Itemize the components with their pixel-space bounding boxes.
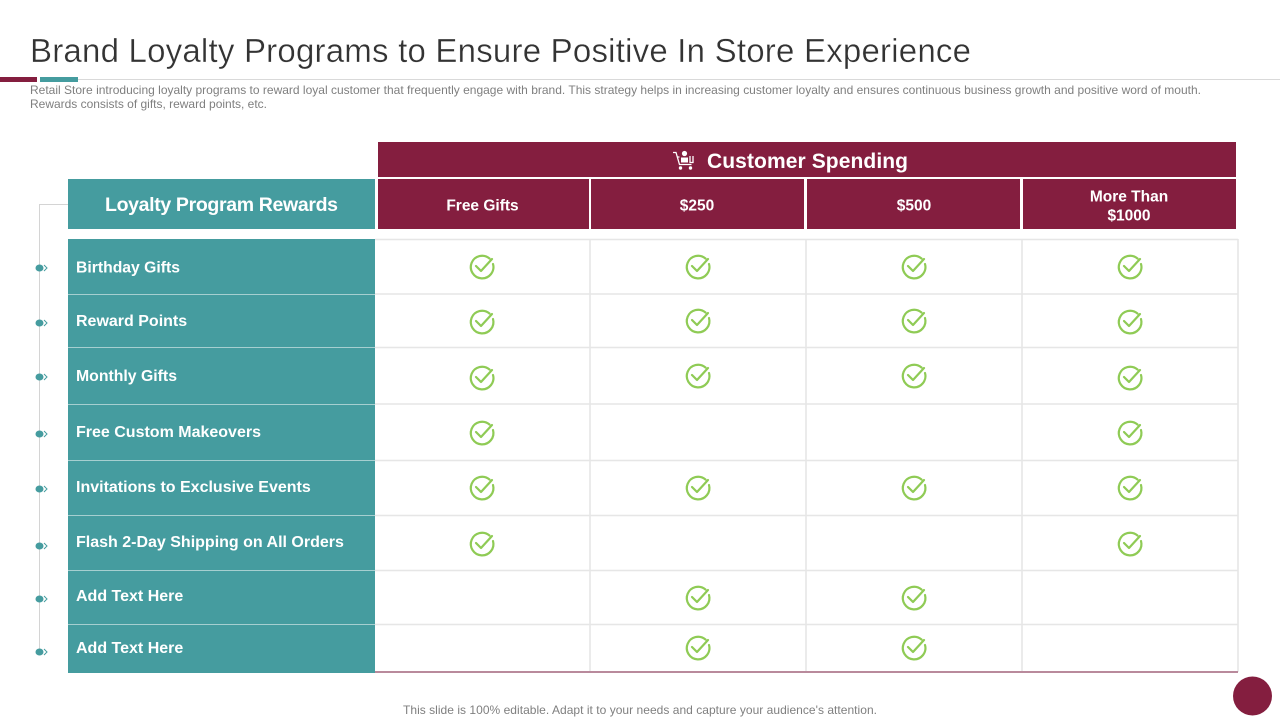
title: Brand Loyalty Programs to Ensure Positive In Store Experience [30, 32, 971, 69]
title accent rule [0, 77, 1280, 82]
panel: reward row labels: Invitations to Exclusive Events [76, 479, 311, 496]
footer note: This slide is 100% editable. Adapt it to your needs and capture your audience's attention. [403, 703, 877, 717]
table bottom rule [375, 671, 1238, 673]
description text: Retail Store introducing loyalty programs to reward loyal customer that frequently engage with brand. This strategy helps in increasing customer loyalty and ensures continuous business growth and positive word of mouth. [30, 83, 1201, 97]
description text: Rewards consists of gifts, reward points, etc. [30, 97, 267, 111]
panel: reward row labels: Add Text Here [76, 640, 183, 657]
timeline connector with row markers [36, 204, 68, 656]
column headers: Free Gifts [446, 198, 519, 214]
panel: reward row labels [68, 239, 375, 673]
check marks [471, 256, 1141, 659]
column headers [378, 179, 1236, 229]
column headers: $500 [897, 198, 931, 214]
panel: reward row labels: Flash 2-Day Shipping on All Orders [76, 534, 344, 551]
panel: reward row labels: Add Text Here [76, 588, 183, 605]
panel: reward row labels: Birthday Gifts [76, 260, 180, 276]
table grid [375, 239, 1238, 672]
column headers: More Than [1090, 188, 1168, 206]
column headers: $1000 [1107, 208, 1151, 224]
panel: reward row labels: Monthly Gifts [76, 368, 177, 385]
description text [30, 83, 1201, 111]
panel: customer spending banner [378, 142, 1236, 177]
heading: loyalty program rewards [68, 179, 375, 229]
column headers: $250 [680, 198, 714, 214]
decorative page circle [1233, 676, 1272, 716]
panel: reward row labels: Reward Points [76, 313, 187, 330]
heading: loyalty program rewards: Loyalty Program Rewards [105, 194, 338, 216]
heading: customer spending: Customer Spending [707, 150, 908, 173]
panel: reward row labels: Free Custom Makeovers [76, 424, 261, 441]
icon: shopping cart [673, 151, 693, 170]
